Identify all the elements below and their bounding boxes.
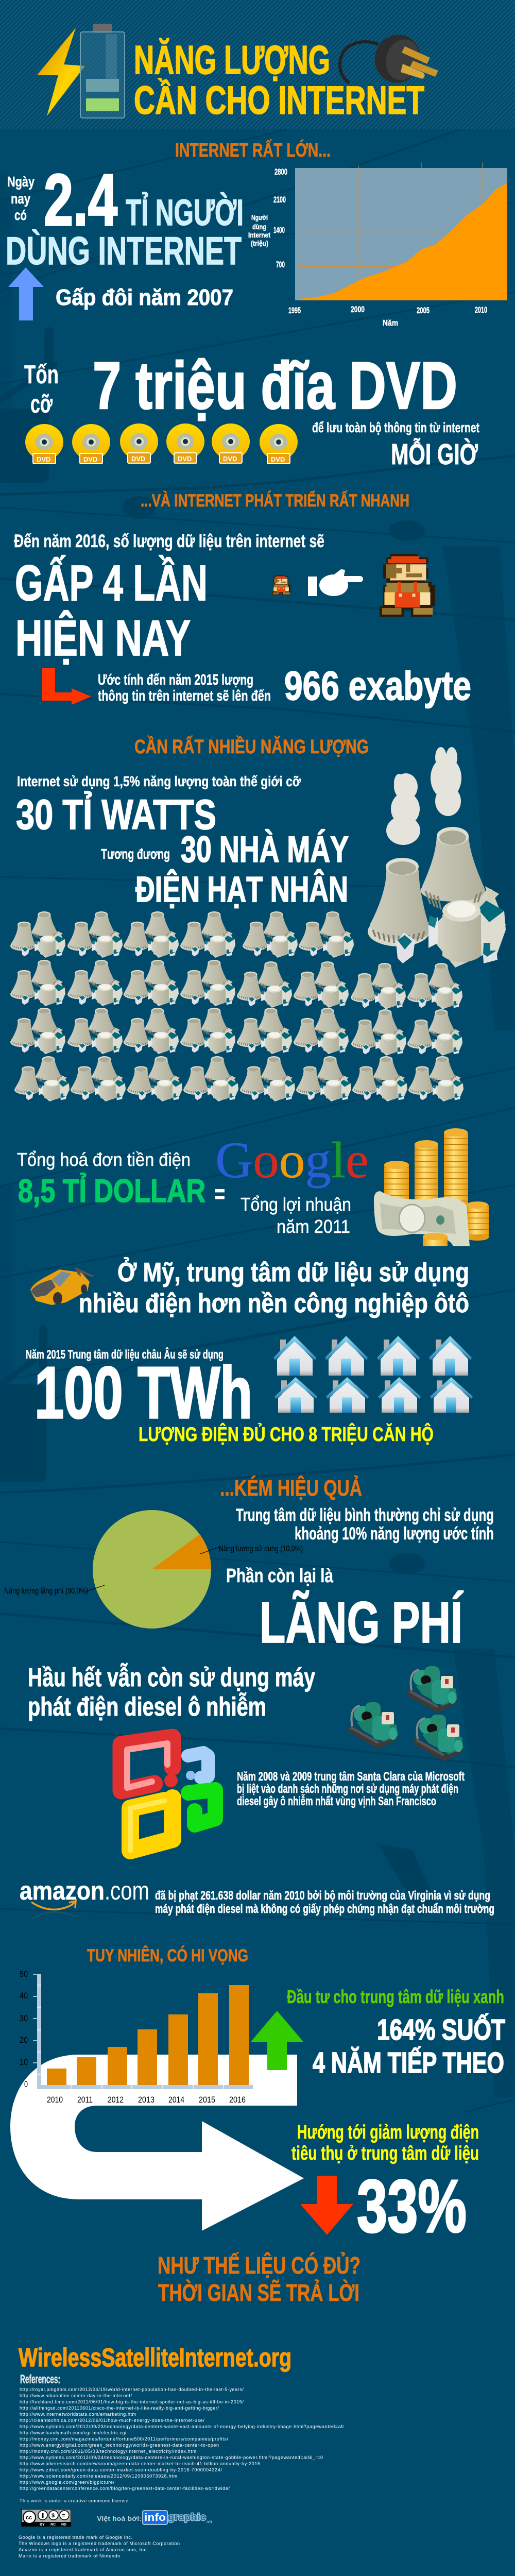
text: reduce consumption	[291, 2122, 479, 2164]
trademark notes: Mario is a registered trademark of Nintendo	[19, 2553, 120, 2558]
text: every hour: MỖI GIỜ	[391, 437, 478, 471]
text: total profit: Tổng lợi nhuận	[241, 1194, 351, 1215]
badge: creative commons: ND	[61, 2523, 66, 2527]
references list: http://www.nytimes.com/2012/09/24/technology/data-centers-in-rural-washington-state-gobble-power.html?pagewanted=all&_r=0	[20, 2455, 323, 2460]
closing question: NHƯ THẾ LIỆU CÓ ĐỦ?	[158, 2252, 360, 2279]
bar chart: green data center growth: 50	[20, 1969, 28, 1979]
trademark notes: Amazon is a registered trademark of Amazon.com, Inc.	[19, 2547, 148, 2552]
section heading: grows fast: ...VÀ INTERNET PHÁT TRIỂN RẤT NHANH	[141, 491, 409, 511]
text: every hour	[312, 420, 479, 471]
text: electricity bill: Tổng hoá đơn tiền điện	[17, 1149, 191, 1170]
text: 30 billion watts: Tương đương	[101, 846, 170, 862]
text: US data centers vs car industry	[79, 1257, 469, 1318]
icon: red elbow arrow	[42, 668, 91, 705]
trademark notes: Google is a registered trade mark of Google Inc.	[19, 2535, 132, 2540]
text: 30 billion watts: Internet sử dụng 1,5% năng lượng toàn thế giới cỡ	[17, 773, 301, 789]
bar chart: green data center growth: 2012	[108, 2095, 124, 2105]
area chart: internet users: (triệu)	[251, 239, 268, 247]
pie chart: energy use	[4, 1510, 303, 1629]
area chart: internet users: dùng	[252, 223, 266, 231]
references list: http://www.mbaonline.com/a-day-in-the-internet/	[20, 2393, 132, 2398]
icon: red down arrow	[300, 2176, 353, 2235]
text: 966 exabyte	[98, 663, 471, 708]
text: the rest is waste	[226, 1565, 464, 1655]
text: 100 TWh	[26, 1347, 252, 1434]
text: electricity bill: =	[214, 1180, 225, 1208]
title	[134, 37, 424, 123]
references heading: References:	[20, 2372, 60, 2386]
badge: creative commons: cc	[26, 2515, 32, 2521]
text: double 2007: Gấp đôi năm 2007	[56, 285, 233, 310]
text: 966 exabyte: Ước tính đến năm 2015 lượng	[98, 672, 253, 688]
badge: creative commons: $	[52, 2513, 55, 2519]
text: users count: DÙNG INTERNET	[6, 229, 242, 273]
text: by 2016: HIỆN NAY	[15, 610, 191, 666]
references list: http://money.cnn.com/2011/05/03/technology/internet_electricity/index.htm	[20, 2449, 196, 2454]
icon: small mario	[272, 575, 290, 595]
references list: http://money.cnn.com/magazines/fortune/fortune500/2011/performers/companies/profits/	[20, 2436, 228, 2442]
header band	[0, 0, 515, 129]
references list: http://www.handymath.com/cgi-bin/electric.cgi	[20, 2430, 126, 2435]
logo: Amazon: .com	[105, 1876, 149, 1905]
bar chart: green data center growth: 20	[20, 2035, 28, 2045]
references list: http://allthingsd.com/20110601/cisco-the-internet-is-like-really-big-and-getting-bigger/	[20, 2405, 219, 2411]
icons: six DVD discs: DVD	[131, 455, 145, 463]
text: diesel generators	[28, 1663, 315, 1721]
text: 30 billion watts	[16, 773, 349, 909]
icons: six DVD discs: DVD	[178, 455, 192, 463]
area chart: internet users: Năm	[383, 319, 398, 328]
bar chart: green data center growth: 2015	[199, 2095, 215, 2105]
credit: translated by infographic.vn: Việt hoá bởi:	[97, 2515, 142, 2522]
title: NĂNG LƯỢNG	[134, 37, 330, 82]
text: by 2016	[14, 531, 324, 666]
badge: creative commons: NC	[50, 2523, 56, 2527]
text: users count: nay	[11, 191, 30, 207]
icon: big nuclear plant	[368, 827, 506, 968]
logo: Google: Google	[215, 1131, 369, 1189]
references list: http://www.pikeresearch.com/newsroom/green-data-center-market-to-reach-41-billion-annually-by-2015	[20, 2461, 260, 2466]
credit: translated by infographic.vn: info	[144, 2512, 166, 2523]
area chart: internet users	[248, 162, 507, 328]
text: 30 billion watts: ĐIỆN HẠT NHÂN	[135, 869, 348, 909]
references list: http://techland.time.com/2011/06/01/how-big-is-the-internet-spoiler-not-as-big-as-itll-be-in-2015/	[20, 2399, 244, 2404]
text: users count: Ngày	[7, 174, 35, 190]
text: 966 exabyte: thông tin trên internet sẽ lên đến	[98, 688, 271, 704]
text: green data center investment	[287, 1986, 505, 2079]
references list: http://www.google.com/green/bigpicture/	[20, 2480, 114, 2485]
text: Amazon fined	[155, 1889, 494, 1916]
bar chart: green data center growth: 10	[20, 2057, 28, 2067]
text: 10 percent used	[236, 1505, 494, 1544]
icon: car	[30, 1267, 94, 1305]
trademark notes: The Windows logo is a registered trademark of Microsoft Corporation	[19, 2541, 180, 2546]
credit: translated by infographic.vn: .vn	[206, 2519, 212, 2524]
icons: six DVD discs: DVD	[271, 455, 285, 463]
bar chart: green data center growth: 2011	[77, 2095, 93, 2105]
logo: Microsoft Office	[121, 1737, 215, 1851]
icon: lightning bolt	[37, 28, 85, 116]
icon: big mario	[380, 554, 435, 617]
area chart: internet users: 2800	[274, 167, 287, 177]
bar chart: green data center growth: 2013	[138, 2095, 154, 2105]
text: enough for 8 million homes: LƯỢNG ĐIỆN ĐỦ CHO 8 TRIỆU CĂN HỘ	[139, 1422, 434, 1446]
icon: green up arrow	[251, 2011, 303, 2070]
text: diesel generators: phát điện diesel ô nhiễm	[28, 1692, 266, 1721]
text: diesel generators: Hầu hết vẫn còn sử dụng máy	[28, 1663, 315, 1692]
area chart: internet users: 2100	[273, 195, 286, 205]
bar chart: green data center growth: 0	[24, 2079, 28, 2089]
source site name: WirelessSatelliteInternet.org	[19, 2343, 291, 2372]
area chart: internet users: 1995	[288, 306, 301, 315]
text: users count: TỈ NGƯỜI	[126, 193, 244, 233]
text: 33 percent: 33%	[357, 2164, 467, 2248]
background: power line silhouettes	[0, 73, 515, 2112]
icon: coins and banknote	[374, 1128, 489, 1246]
bar chart: green data center growth	[20, 1969, 253, 2105]
references list: http://www.zdnet.com/green-data-center-market-seen-doubling-by-2016-7000004324/	[20, 2467, 222, 2472]
icons: six DVD discs: DVD	[37, 455, 50, 463]
references list: http://royal.pingdom.com/2012/04/19/world-internet-population-has-doubled-in-the-last-5-years/	[20, 2387, 244, 2392]
logo: Amazon: amazon	[20, 1876, 105, 1905]
text: electricity bill: 8,5 TỈ DOLLAR	[18, 1173, 205, 1209]
text: 966 exabyte: 966 exabyte	[284, 663, 471, 708]
icons: eight houses	[273, 1336, 473, 1413]
text: size in DVDs: Tốn	[24, 360, 59, 389]
icons: six DVD discs: DVD	[223, 455, 237, 463]
text: the rest is waste: Phần còn lại là	[226, 1565, 334, 1587]
icon: battery	[80, 24, 125, 118]
white U-turn arrow	[10, 2055, 304, 2231]
icon: power plug	[340, 29, 438, 88]
icons: six DVD discs	[25, 423, 298, 464]
license note: This work is under a creative commons license	[20, 2498, 128, 2503]
bar chart: green data center growth: 30	[20, 2013, 28, 2023]
icons: thirty nuclear plants	[10, 911, 464, 1101]
text: 100 TWh: Năm 2015 Trung tâm dữ liệu châu Âu sẽ sử dụng	[26, 1347, 224, 1362]
bar chart: green data center growth: 2010	[47, 2095, 63, 2105]
references list: http://greendatacenterconference.com/blog/ten-greenest-data-center-facilities-worldwide/	[20, 2486, 230, 2491]
icons: three generators	[348, 1666, 464, 1761]
bar chart: green data center growth: 2014	[168, 2095, 184, 2105]
logo: Amazon	[20, 1876, 149, 1919]
badge: creative commons: =	[62, 2513, 65, 2519]
section heading: inefficient: ...KÉM HIỆU QUẢ	[220, 1475, 362, 1501]
area chart: internet users: 2005	[417, 306, 430, 315]
text: size in DVDs: cỡ	[30, 389, 53, 418]
text: electricity bill	[17, 1149, 225, 1209]
text: users count	[6, 159, 244, 273]
bar chart: green data center growth: 2016	[229, 2095, 246, 2105]
text: users count: có	[14, 207, 27, 223]
references list: http://cleantechnica.com/2012/06/01/how-much-energy-does-the-internet-use/	[20, 2418, 204, 2423]
icon: steam	[386, 747, 461, 845]
area chart: internet users: 2000	[351, 304, 365, 314]
credit: translated by infographic.vn	[97, 2511, 212, 2524]
references list: http://www.internetworldstats.com/emarketing.htm	[20, 2412, 136, 2417]
text: users count: 2.4	[44, 159, 117, 241]
text: Microsoft Santa Clara	[237, 1770, 465, 1808]
area chart: internet users: 2010	[475, 305, 487, 315]
trademark notes	[19, 2535, 180, 2558]
text: 100 TWh: 100 TWh	[35, 1352, 252, 1434]
credit: translated by infographic.vn: graphic	[168, 2512, 206, 2523]
section heading: lots of energy: CẦN RẤT NHIỀU NĂNG LƯỢNG	[134, 735, 369, 758]
references list: http://www.sciencedaily.com/releases/2012/09/120906073928.htm	[20, 2473, 177, 2479]
area chart: internet users: 1400	[273, 225, 285, 235]
area chart: internet users: Người	[251, 213, 268, 222]
pie chart: energy use: Năng lượng sử dụng (10,0%)	[219, 1545, 303, 1553]
references list: http://www.energydigital.com/green_technology/worlds-greenest-data-center-to-open	[20, 2443, 219, 2448]
background: utility poles and transformers	[0, 175, 515, 2097]
bar chart: green data center growth: 40	[20, 1991, 28, 2001]
references list: http://www.nytimes.com/2012/09/23/technology/data-centers-waste-vast-amounts-of-energy-belying-industry-image.html?pagewanted=all	[20, 2424, 344, 2429]
text: 30 billion watts: 30 NHÀ MÁY	[181, 829, 349, 870]
pie chart: energy use: Năng lượng lãng phí (90,0%)	[4, 1587, 88, 1596]
closing question: THỜI GIAN SẼ TRẢ LỜI	[158, 2279, 359, 2306]
references list	[20, 2387, 344, 2491]
section heading: internet is big: INTERNET RẤT LỚN...	[175, 139, 331, 161]
text: by 2016: GẤP 4 LẦN	[15, 555, 208, 611]
icon: pointing hand	[308, 569, 363, 596]
text: by 2016: Đến năm 2016, số lượng dữ liệu trên internet sẽ	[14, 531, 324, 551]
area chart: internet users: 700	[276, 260, 285, 269]
closing question	[158, 2252, 360, 2306]
badge: creative commons	[21, 2509, 71, 2527]
text: total profit	[241, 1194, 351, 1237]
badge: creative commons: BY	[40, 2523, 45, 2527]
icons: six DVD discs: DVD	[83, 455, 97, 463]
text: total profit: năm 2011	[277, 1216, 350, 1237]
section heading: but there is hope: TUY NHIÊN, CÓ HI VỌNG	[87, 1946, 248, 1965]
text: 30 billion watts: 30 TỈ WATTS	[16, 791, 216, 838]
icon: blue up arrow	[8, 267, 44, 320]
area chart: internet users: Internet	[248, 231, 270, 239]
